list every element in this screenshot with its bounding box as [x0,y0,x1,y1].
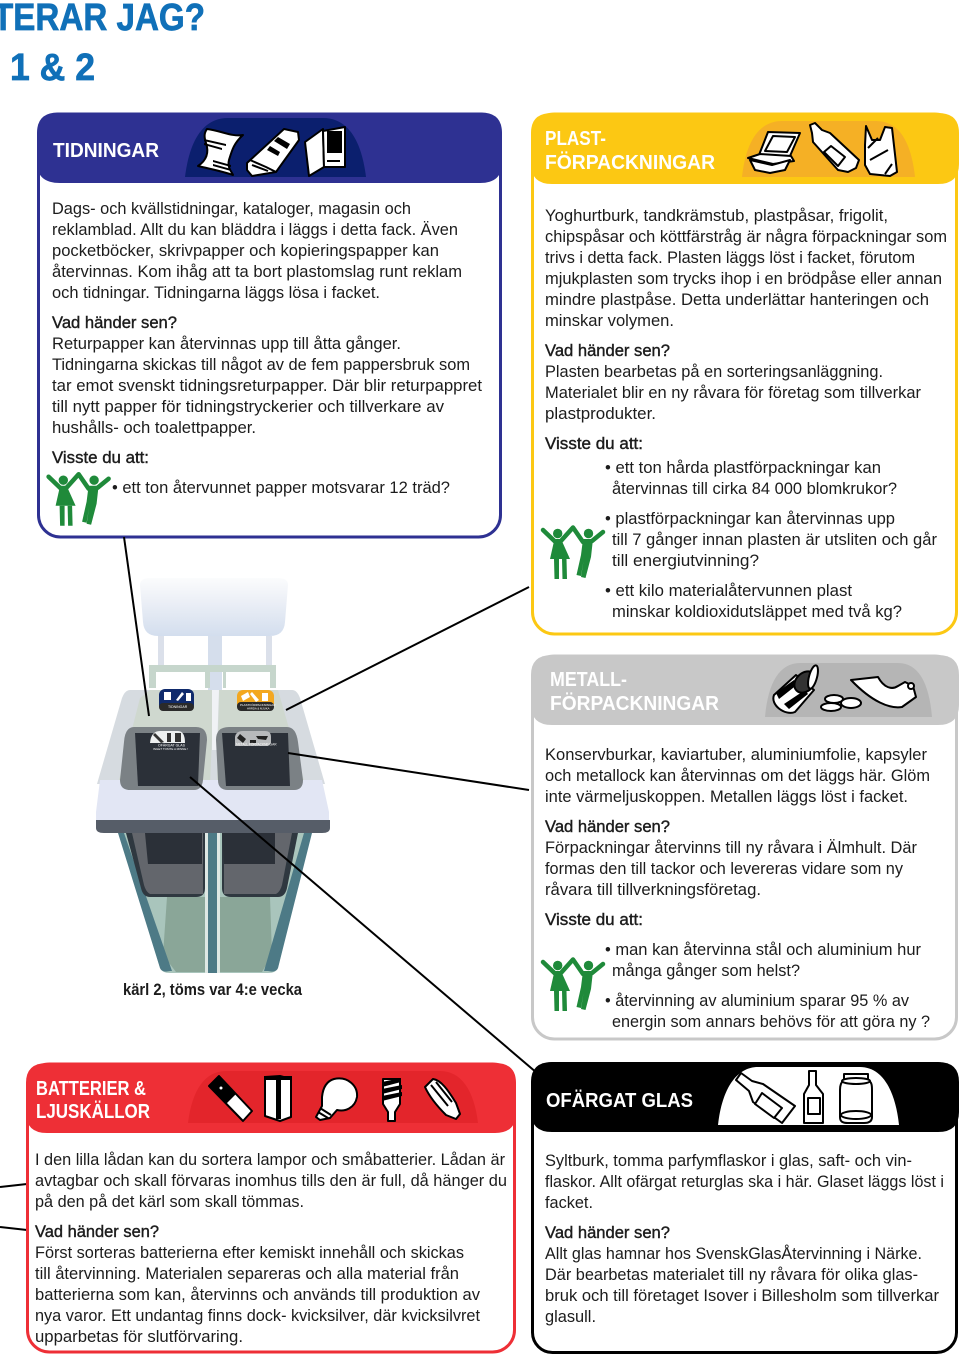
plast heading [545,128,716,174]
tidningar body text: och tidningar. Tidningarna läggs lösa i facket. [52,284,380,302]
recycling bin illustration [96,578,330,973]
plast body text: chipspåsar och köttfärstråg är några förpackningar som [545,228,947,246]
bin label: tidningar: TIDNINGAR [168,705,188,709]
glas body text [545,1152,944,1326]
icons: batteries and bulbs [188,1071,478,1123]
metall header [531,655,959,725]
bin label: glas: INGET TOMTE A MINNE ! [153,747,188,751]
plast header [531,113,959,184]
plast body text: mjukplasten som trycks ihop i en brödpåse eller annan [545,270,942,288]
glas body text: flaskor. Allt ofärgat returglas ska i här. Glaset läggs löst i [545,1173,944,1191]
batterier body text: till återvinning. Materialen separeras och alla material från [35,1265,459,1283]
bin label: plast: HÅRDA & MJUKA [247,706,270,710]
plast body text: trivs i detta fack. Plasten läggs löst i facket, förutom [545,249,915,267]
glas body text: Allt glas hamnar hos SvenskGlasÅtervinning i Närke. [545,1244,922,1263]
batterier body text: på den på det kärl som skall tömmas. [35,1193,304,1211]
metall body text: Vad händer sen? [545,818,670,836]
tidningar body text: hushålls- och toalettpapper. [52,419,256,437]
tidningar body text: återvinnas. Kom ihåg att ta bort plastomslag runt reklam [52,263,462,281]
metall body text [545,746,930,1031]
tidningar body text: Visste du att: [52,449,149,467]
batterier body text: avtagbar och skall förvaras inomhus tills den är full, då hänger du [35,1172,507,1190]
batterier heading: LJUSKÄLLOR [36,1100,150,1123]
panel: batterier och ljuskällor [26,1063,516,1352]
tidningar body text: reklamblad. Allt du kan bläddra i läggs i detta fack. Även [52,221,458,239]
icon: people [543,528,603,579]
tidningar body text: Tidningarna skickas till något av de fem pappersbruk som [52,356,470,374]
glas header [531,1062,959,1132]
glas body text: Syltburk, tomma parfymflaskor i glas, saft- och vin- [545,1152,912,1170]
metall body text: Visste du att: [545,911,643,929]
batterier heading: BATTERIER & [36,1078,146,1100]
tidningar body text [52,200,482,497]
bin caption: kärl 2, töms var 4:e vecka [123,981,303,999]
icon: people [49,474,109,526]
plast body text: Yoghurtburk, tandkrämstub, plastpåsar, frigolit, [545,207,888,225]
metall body text: råvara till tillverkningsföretag. [545,881,761,899]
tidningar body text: Vad händer sen? [52,314,177,332]
plast body text: till 7 gånger innan plasten är utsliten och går [612,531,938,549]
metall body text: energin som annars behövs för att göra ny ? [612,1013,930,1031]
plast heading: PLAST- [545,128,606,150]
tidningar body text: Returpapper kan återvinnas upp till åtta gånger. [52,335,401,353]
batterier body text: Vad händer sen? [35,1223,159,1241]
tidningar header [37,112,502,183]
batterier body text: nya varor. Ett undantag finns dock- kvicksilver, där kvicksilvret [35,1307,480,1325]
plast body text: minskar volymen. [545,312,674,330]
panel: plastförpackningar [531,113,959,634]
glas body text: Där bearbetas materialet till ny råvara för olika glas- [545,1266,918,1284]
plast body text: • plastförpackningar kan återvinnas upp [605,510,895,528]
glas body text: Vad händer sen? [545,1224,670,1242]
bin label: tidningar [159,689,194,711]
metall body text: Konservburkar, kaviartuber, aluminiumfolie, kapsyler [545,746,928,764]
metall body text: • man kan återvinna stål och aluminium hur [605,941,922,959]
batterier header [26,1063,516,1133]
plast body text: till energiutvinning? [612,552,759,570]
bin label: glas [150,731,188,751]
plast body text: mindre plastpåse. Detta underlättar hanteringen och [545,291,929,309]
bin label: plast [237,690,276,711]
metall body text: inte värmeljuskoppen. Metallen läggs löst i facket. [545,788,908,806]
icons: bottle, small bottle, jar [718,1067,899,1125]
tidningar body text: till nytt papper för tidningstryckerier och tillverkare av [52,398,445,416]
batterier body text: upparbetas för slutförvaring. [35,1328,243,1346]
batterier body text [35,1151,507,1346]
tidningar heading: TIDNINGAR [53,140,160,162]
glas body text: facket. [545,1194,593,1212]
tidningar body text: Dags- och kvällstidningar, kataloger, magasin och [52,200,411,218]
panel: tidningar [37,112,502,537]
batterier body text: Först sorteras batterierna efter kemiskt innehåll och skickas [35,1244,464,1262]
panel: ofärgat glas [531,1062,959,1352]
metall body text: • återvinning av aluminium sparar 95 % av [605,992,910,1010]
tidningar body text: tar emot svenskt tidningsreturpapper. Där blir returpappret [52,377,482,395]
bin label: metall [235,731,277,746]
metall heading [550,669,720,715]
bin label: plast: PLASTFÖRPACKNINGAR [240,703,276,707]
tidningar body text: • ett ton återvunnet papper motsvarar 12 träd? [112,479,450,497]
bin label: metall: METALL FÖRPACKNINGAR [236,742,277,746]
icons: box, bottle, bag [742,121,915,177]
bin label: glas: OFÄRGAT GLAS [158,744,186,748]
plast body text: plastprodukter. [545,405,656,423]
title: 1 & 2 [10,47,95,89]
plast body text: minskar koldioxidutsläppet med två kg? [612,603,902,621]
title [0,0,205,89]
plast body text [545,207,947,621]
plast body text: • ett ton hårda plastförpackningar kan [605,459,881,477]
tidningar body text: pocketböcker, skrivpapper och kopieringspapper kan [52,242,439,260]
glas body text: glasull. [545,1308,596,1326]
icon: people [543,960,603,1011]
metall heading: FÖRPACKNINGAR [550,692,720,715]
batterier body text: batterierna som kan, återvinns och används till produktion av [35,1286,481,1304]
metall body text: Förpackningar återvinns till ny råvara i Älmhult. Där [545,839,918,857]
plast body text: Plasten bearbetas på en sorteringsanläggning. [545,363,883,381]
metall body text: många gånger som helst? [612,962,800,980]
plast body text: • ett kilo materialåtervunnen plast [605,582,852,600]
icons: can, caps, tube [765,663,932,717]
plast body text: Visste du att: [545,435,643,453]
metall body text: och metallock kan återvinnas om det läggs här. Glöm [545,767,930,785]
plast heading: FÖRPACKNINGAR [545,151,716,174]
panel: metallförpackningar [531,655,959,1039]
batterier body text: I den lilla lådan kan du sortera lampor och småbatterier. Lådan är [35,1151,506,1169]
glas heading: OFÄRGAT GLAS [546,1089,693,1112]
batterier heading [36,1078,150,1123]
icons: newspapers and magazines [185,118,366,177]
metall body text: formas den till tackor och levereras vidare som ny [545,860,904,878]
glas body text: bruk och till företaget Isover i Billesholm som tillverkar [545,1287,940,1305]
plast body text: återvinnas till cirka 84 000 blomkrukor? [612,480,897,498]
metall heading: METALL- [550,669,627,691]
plast body text: Vad händer sen? [545,342,670,360]
plast body text: Materialet blir en ny råvara för företag som tillverkar [545,384,922,402]
connector lines from bin to panels [0,537,537,1230]
